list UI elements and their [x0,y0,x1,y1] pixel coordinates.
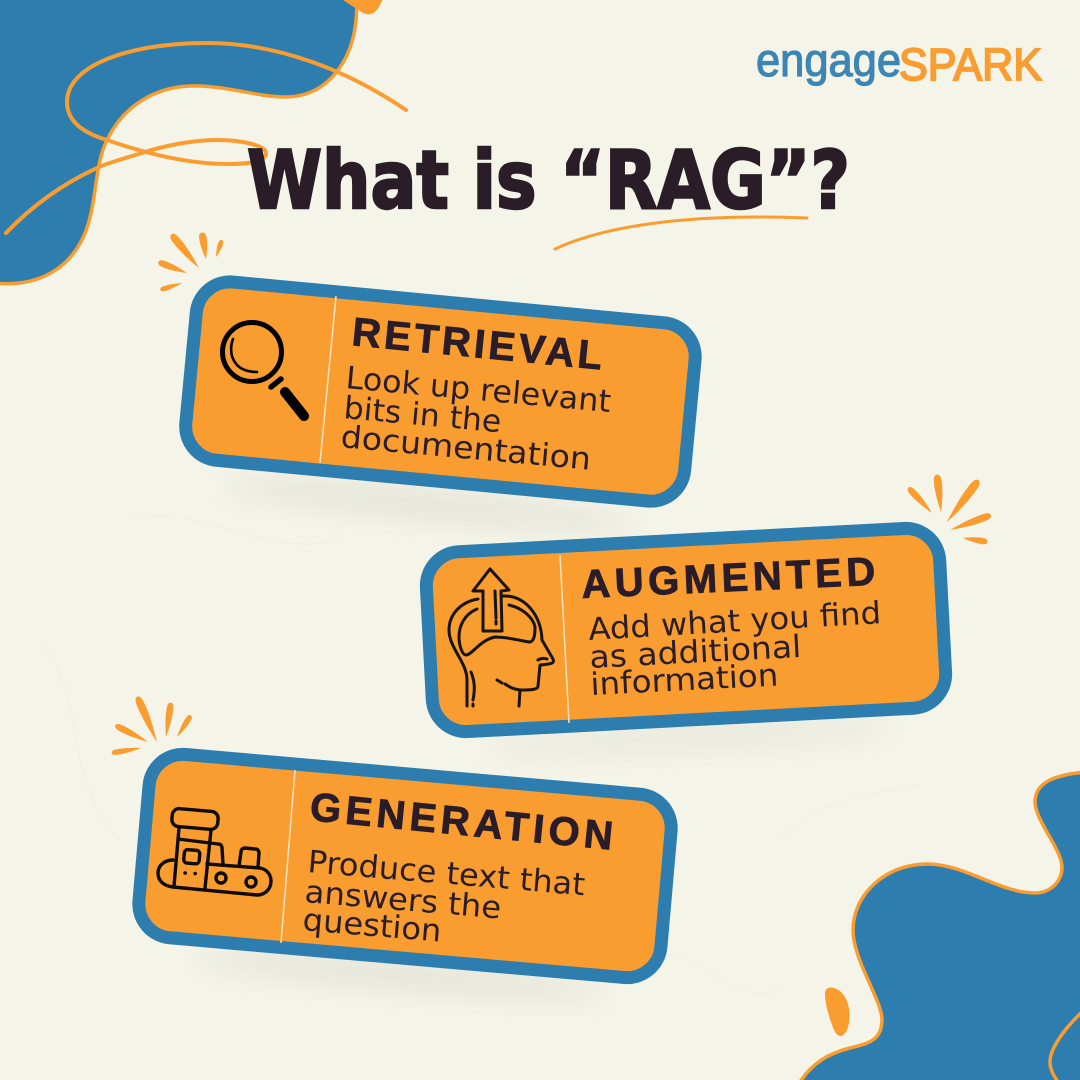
description: generation: Produce text that [306,844,586,903]
logo: engageSPARK: engage [756,34,901,86]
description: generation: answers the [303,874,503,926]
description: augmented: information [590,658,779,703]
card: augmented [425,527,947,733]
card: retrieval [183,279,698,504]
description: retrieval: documentation [339,419,593,478]
logo: engageSPARK: SPARK [899,39,1042,90]
icon: magnifying glass [222,322,304,416]
description: retrieval: Look up relevant [344,360,612,420]
card body [425,527,947,733]
decorative blob: top left [0,0,383,284]
sparks: retrieval card [157,232,224,292]
heading: GENERATION: GENERATION [308,785,615,859]
title underline stroke [555,217,807,249]
sparks: generation card [111,695,193,756]
card body [136,752,674,980]
divider [281,770,295,943]
heading: AUGMENTED: AUGMENTED [580,550,876,607]
icon: conveyor machine [158,808,271,895]
divider [320,296,336,463]
description: generation [301,844,586,950]
title: What is “RAG”? [247,134,850,227]
heading: RETRIEVAL: RETRIEVAL [350,310,604,378]
logo: engageSPARK [756,34,1042,90]
description: generation: question [301,902,443,950]
description: retrieval: bits in the [342,390,503,440]
divider [560,555,569,723]
description: augmented: as additional [589,629,802,676]
sparks: augmented card [906,474,992,545]
card body [183,279,698,504]
card shadows [190,473,900,1005]
icon: head with upward arrow [449,569,553,706]
decorative squiggle: top left [6,43,406,233]
decorative blob: bottom right [798,772,1080,1080]
description: augmented: Add what you find [587,595,882,648]
card: generation [136,752,674,980]
description: retrieval [339,360,612,478]
description: augmented [587,595,882,703]
